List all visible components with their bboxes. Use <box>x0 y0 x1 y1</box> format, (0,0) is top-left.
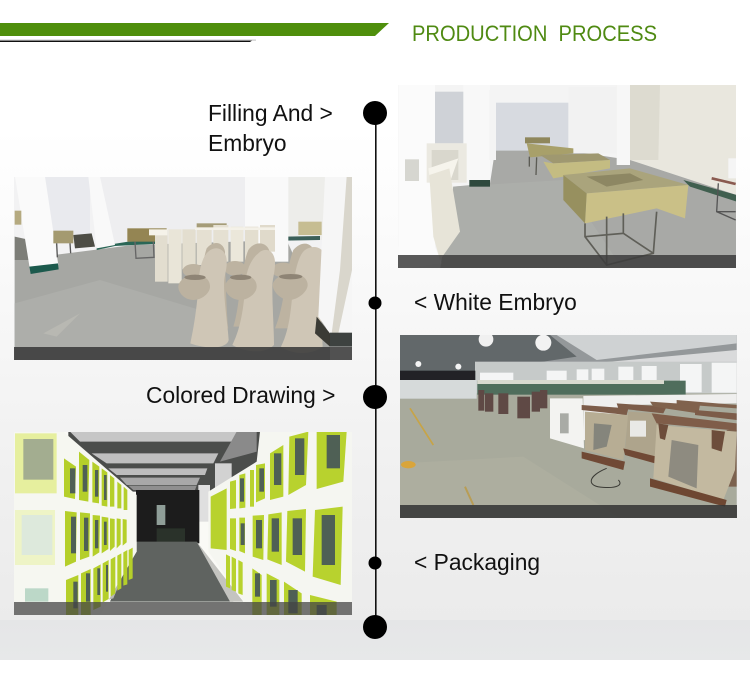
molds <box>15 211 21 225</box>
photo: packaged boxes corridor <box>14 432 352 615</box>
white rows <box>399 380 477 399</box>
ceiling <box>399 335 737 372</box>
caption band <box>14 347 352 360</box>
far molds <box>525 137 550 143</box>
right wall <box>617 85 737 195</box>
dark corridor <box>136 490 199 543</box>
label: colored drawing: Colored Drawing > <box>146 382 335 408</box>
node 3 <box>363 385 387 409</box>
near left posters <box>15 433 57 493</box>
node 1 <box>363 101 387 125</box>
floor <box>15 240 330 363</box>
label: filling and embryo: Filling And > <box>208 100 333 126</box>
floor <box>110 542 233 602</box>
white embryo columns <box>427 143 467 183</box>
floor <box>440 151 737 270</box>
label: white embryo: < White Embryo <box>414 289 577 315</box>
windows wall <box>475 362 737 395</box>
fireplace 4 <box>653 425 737 500</box>
back wall trim <box>73 233 95 248</box>
node 4 <box>368 556 382 570</box>
fireplace 3 <box>650 402 700 413</box>
white columns <box>155 230 168 282</box>
fireplace 2 <box>625 412 660 457</box>
timeline <box>363 101 387 639</box>
pillars <box>568 87 617 153</box>
statues <box>190 247 325 353</box>
left wall <box>13 432 137 615</box>
caption band <box>14 602 352 615</box>
photo: fireplaces in factory hall <box>400 335 737 518</box>
white fireplace <box>550 398 584 448</box>
label: filling and embryo <box>208 100 333 156</box>
power cable <box>591 468 620 488</box>
left panels <box>64 452 133 615</box>
floor <box>399 393 737 520</box>
near mold <box>563 168 688 193</box>
right wall <box>318 177 352 333</box>
title: PRODUCTION PROCESS <box>412 21 657 46</box>
box pictures <box>70 435 340 615</box>
caption band <box>400 505 737 518</box>
white backdrop of fireplaces <box>583 394 737 443</box>
label: packaging: < Packaging <box>414 549 540 575</box>
photo: statues in workshop <box>14 177 352 360</box>
caption band <box>398 255 736 268</box>
ceiling and beams <box>68 432 262 492</box>
right panels <box>211 432 347 615</box>
fireplace 1 <box>585 412 628 460</box>
pillars <box>15 177 58 270</box>
yellow floor marks <box>410 408 433 445</box>
back row statues <box>183 243 318 328</box>
node 2 <box>368 296 382 310</box>
statue rows <box>477 381 686 395</box>
header banner <box>0 23 389 42</box>
right bench <box>712 178 736 184</box>
stand <box>585 212 657 265</box>
node 5 <box>363 615 387 639</box>
photo: molds on stands <box>398 85 736 268</box>
label: filling and embryo: Embryo <box>208 130 287 156</box>
